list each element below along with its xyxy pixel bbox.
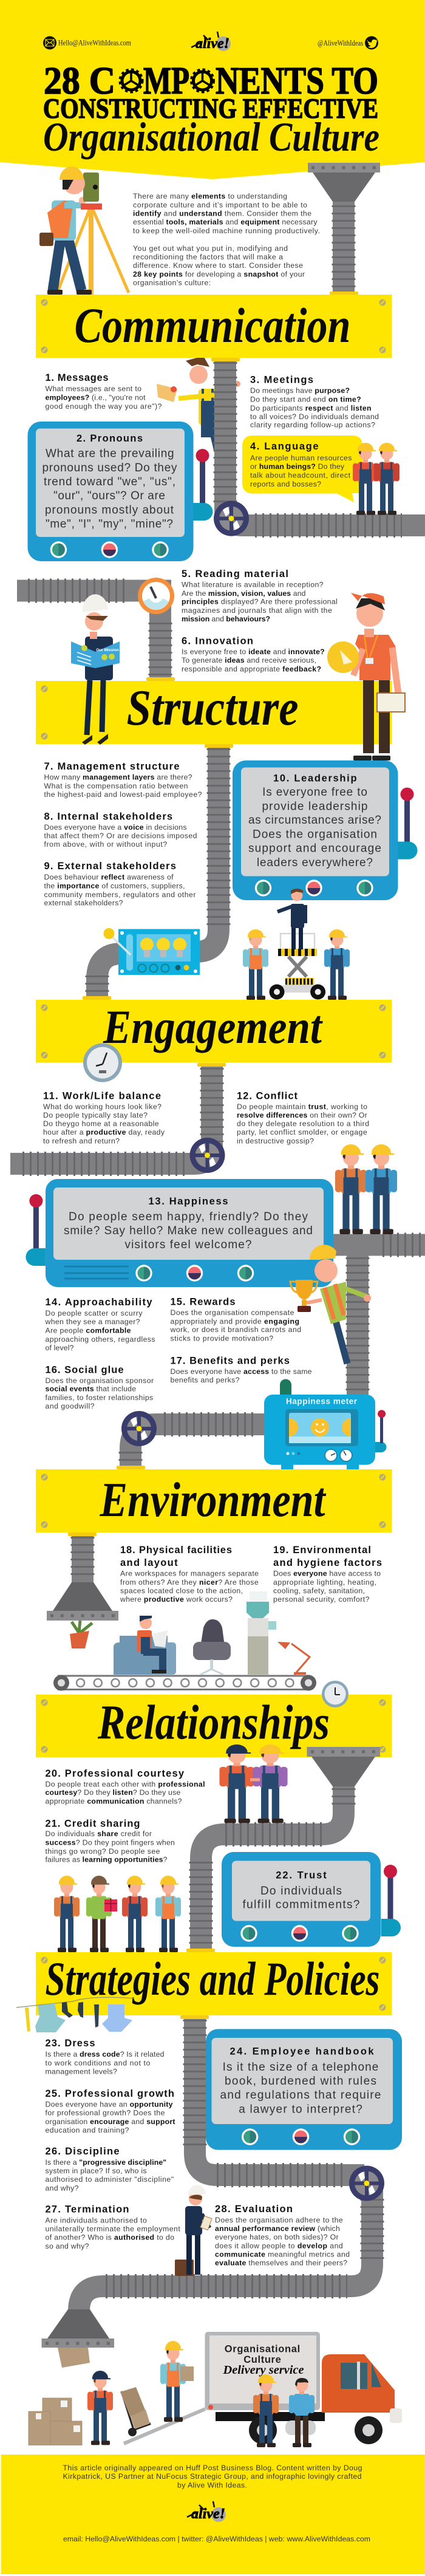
item 27 termination: unilaterally terminate the employment — [45, 2224, 180, 2233]
item 14 approachability: Are people comfortable — [45, 1327, 131, 1335]
item 28 evaluation: communicate meaningful metrics and — [215, 2250, 350, 2258]
item 17 benefits and perks — [170, 1356, 312, 1384]
panel: item 22 trust machine: 22. Trust — [276, 1870, 327, 1881]
item 14 approachability: Do people scatter or scurry — [45, 1309, 143, 1317]
item 18 physical facilities: from others? Are they nicer? Are those — [120, 1578, 259, 1587]
handshake workers — [219, 1744, 288, 1823]
truck box: Delivery service — [222, 2363, 304, 2377]
icon: email — [43, 36, 56, 50]
office furniture on conveyor — [53, 1591, 316, 1691]
item 28 evaluation: does it allow people to develop and — [215, 2241, 343, 2250]
panel: item 24 employee handbook machine: a lawyer to interpret? — [239, 2103, 362, 2116]
item 3 meetings: clarity regarding follow-up actions? — [250, 421, 375, 429]
intro funnel pipe — [308, 163, 380, 295]
intro text: corporate culture and it’s important to be able to — [133, 200, 307, 209]
item 25 professional growth: Does everyone have an opportunity — [45, 2100, 173, 2109]
item 21 credit sharing: Do individuals share credit for — [45, 1830, 152, 1838]
item 16 social glue — [45, 1365, 154, 1410]
item 18 physical facilities — [120, 1545, 259, 1604]
item 3 meetings: to all voices? Do individuals demand — [250, 412, 379, 421]
item 18 physical facilities: 18. Physical facilities — [120, 1545, 232, 1556]
panel: item 10 leadership machine — [233, 760, 418, 900]
item 27 termination — [45, 2204, 180, 2250]
clock on relationships bar — [322, 1681, 348, 1707]
contact row — [43, 32, 378, 52]
footer — [1, 2455, 425, 2574]
panel: item 24 employee handbook machine: Is it the size of a telephone — [223, 2061, 378, 2074]
ramp — [124, 2409, 205, 2444]
item 12 conflict: resolve differences on their own? Or — [237, 1111, 367, 1119]
item 5 reading material: principles displayed? Are there professional — [182, 598, 338, 606]
callout: item 4 language: or human beings? Do they — [250, 462, 345, 471]
pipe: happiness T junction — [333, 1245, 425, 1395]
callout: item 4 language: talk about headcount, direct — [250, 471, 351, 480]
callout: item 4 language — [242, 436, 362, 502]
intro text: 28 key points for developing a snapshot of your — [133, 270, 305, 278]
item 16 social glue: 16. Social glue — [45, 1365, 124, 1376]
item 15 rewards: sticks to provide motivation? — [170, 1334, 273, 1343]
item 9 external stakeholders — [44, 861, 195, 907]
section heading: Engagement — [36, 1000, 392, 1063]
item 8 internal stakeholders: Does everyone have a voice in decisions — [44, 823, 187, 832]
item 11 work life balance — [43, 1090, 165, 1146]
item 9 external stakeholders: community members, regulators and other — [44, 890, 195, 899]
panel: item 2 pronouns machine: What are the prevailing — [46, 448, 174, 460]
item 26 discipline: Is there a "progressive discipline" — [45, 2158, 166, 2167]
pipe and valve: happiness meter to environment — [117, 1411, 267, 1469]
footer credit text: Kirkpatrick, US Partner at NuFocus Strategic Group, and infographic lovingly crafted — [63, 2472, 362, 2481]
item 7 management structure: 7. Management structure — [44, 761, 180, 772]
item 7 management structure: How many management layers are there? — [44, 773, 192, 781]
item 7 management structure — [44, 761, 202, 799]
item 27 termination: so and why? — [45, 2242, 89, 2250]
item 1 messages: 1. Messages — [45, 372, 108, 383]
item 28 evaluation: 28. Evaluation — [215, 2204, 293, 2215]
item 3 meetings: Do they start and end on time? — [250, 395, 361, 404]
worker on ramp — [160, 2341, 186, 2422]
title line 1: 28 C — [44, 59, 115, 102]
tripod — [56, 205, 129, 295]
item 8 internal stakeholders: that affect them? Or are decisions imposed — [44, 832, 197, 840]
item 16 social glue: and goodwill? — [45, 1402, 95, 1410]
item 12 conflict: in destructive gossip? — [237, 1137, 314, 1146]
item 27 termination: 27. Termination — [45, 2204, 129, 2215]
panel: item 10 leadership machine: 10. Leadership — [273, 773, 357, 784]
item 18 physical facilities: where productive work occurs? — [120, 1595, 233, 1604]
messenger worker — [157, 356, 240, 453]
delivery scene — [29, 2332, 402, 2447]
footer credit text — [63, 2464, 362, 2489]
item 8 internal stakeholders: from above, with or without input? — [44, 840, 167, 849]
truck box: Culture — [243, 2354, 281, 2365]
section heading: Structure — [36, 680, 392, 744]
item 21 credit sharing: 21. Credit sharing — [45, 1819, 140, 1830]
item 17 benefits and perks: 17. Benefits and perks — [170, 1356, 290, 1367]
panel: item 10 leadership machine: provide leadership — [262, 801, 368, 813]
item 11 work life balance: 11. Work/Life balance — [43, 1090, 161, 1101]
item 20 professional courtesy: Do people treat each other with professional — [45, 1780, 205, 1788]
item 8 internal stakeholders: 8. Internal stakeholders — [44, 811, 172, 822]
item 28 evaluation — [215, 2204, 350, 2267]
item 5 reading material: What literature is available in reception? — [182, 581, 324, 589]
item 15 rewards: work, or does it brandish carrots and — [170, 1325, 301, 1334]
item 25 professional growth: education and training? — [45, 2126, 129, 2134]
header yellow banner — [0, 0, 425, 179]
section heading: Communication: Communication — [74, 298, 351, 353]
item 26 discipline — [45, 2146, 174, 2192]
item 15 rewards — [170, 1297, 301, 1343]
item 19 environmental and hygiene: cooling, safety, sanitation, — [273, 1587, 365, 1595]
item 15 rewards: 15. Rewards — [170, 1297, 236, 1308]
callout: item 4 language: reports and bosses? — [250, 480, 321, 488]
item 5 reading material: mission and behaviours? — [182, 615, 270, 623]
item 11 work life balance: Do people typically stay late? — [43, 1111, 148, 1119]
panel: item 2 pronouns machine — [28, 422, 212, 561]
item 12 conflict — [237, 1090, 369, 1146]
intro text: to keep the well-oiled machine running productively. — [133, 227, 320, 235]
item 19 environmental and hygiene: and hygiene factors — [273, 1557, 382, 1568]
item 3 meetings: 3. Meetings — [250, 374, 313, 385]
item 9 external stakeholders: the importance of customers, suppliers, — [44, 882, 185, 890]
manager with briefcase — [175, 2185, 212, 2276]
trophy — [290, 1280, 318, 1312]
plant — [70, 1621, 92, 1648]
item 27 termination: of another? Who is authorised to do — [45, 2233, 174, 2242]
panel: item 2 pronouns machine: "me", "I", "my", "mine"? — [46, 518, 173, 531]
truck box — [205, 2332, 325, 2421]
item 12 conflict: 12. Conflict — [237, 1090, 298, 1101]
panel: item 2 pronouns machine: trend toward "we", "us", — [44, 476, 175, 488]
item 20 professional courtesy: 20. Professional courtesy — [45, 1768, 185, 1779]
worker with cap — [87, 2371, 113, 2445]
item 11 work life balance: hour after a productive day, ready — [43, 1128, 165, 1136]
happiness meter — [264, 1379, 386, 1469]
section heading: Relationships: Relationships — [97, 1696, 330, 1749]
lift — [270, 934, 325, 1000]
item 9 external stakeholders: external stakeholders? — [44, 899, 123, 907]
panel: item 2 pronouns machine: 2. Pronouns — [76, 433, 143, 444]
pipe: strategies to valve to funnel — [41, 2015, 384, 2348]
item 11 work life balance: What do working hours look like? — [43, 1102, 162, 1111]
reading man with mission book — [71, 594, 120, 745]
pipe: communication to valve — [211, 358, 425, 536]
item 5 reading material: 5. Reading material — [182, 569, 288, 579]
panel: item 2 pronouns machine: "our", "ours"? Or are — [53, 490, 165, 502]
item 1 messages: good enough the way you are")? — [45, 402, 162, 411]
manager on scissor lift with two workers — [243, 889, 350, 1000]
callout: item 4 language: Are people human resources — [250, 454, 352, 462]
item 14 approachability — [45, 1297, 155, 1352]
falling box — [58, 2348, 90, 2368]
item 17 benefits and perks: Does everyone have access to the same — [170, 1367, 312, 1376]
item 21 credit sharing: things go wrong? Do people see — [45, 1847, 160, 1856]
item 6 innovation — [182, 636, 325, 673]
pipe: relationships funnel to strategies — [186, 1747, 380, 1952]
item 21 credit sharing: failures as learning opportunities? — [45, 1856, 168, 1864]
panel: item 10 leadership machine: Does the organisation — [253, 828, 377, 841]
intro text: You get out what you put in, modifying and — [133, 244, 288, 253]
item 18 physical facilities: and layout — [120, 1557, 178, 1568]
truck cab — [249, 2354, 402, 2444]
footer logo — [187, 2501, 226, 2522]
item 14 approachability: 14. Approachability — [45, 1297, 152, 1308]
climbing worker with trophy — [290, 1245, 371, 1364]
panel: item 2 pronouns machine: pronouns used? Do they — [42, 462, 177, 474]
item 6 innovation: responsible and appropriate feedback? — [182, 664, 321, 673]
item 12 conflict: party, let conflict smolder, or engage — [237, 1128, 367, 1136]
hand truck — [120, 2387, 151, 2436]
four workers sharing credit — [54, 1876, 181, 1952]
pressure gauge — [138, 578, 174, 614]
panel: item 22 trust machine: fulfill commitments? — [243, 1899, 359, 1911]
pipe: structure down to lights panel and engagement — [83, 744, 233, 1000]
item 23 dress: to work conditions and not to — [45, 2058, 150, 2067]
item 19 environmental and hygiene: 19. Environmental — [273, 1545, 371, 1556]
desk lamp — [277, 1642, 310, 1675]
truck box: Organisational — [225, 2343, 300, 2354]
item 3 meetings: Do meetings have purpose? — [250, 386, 350, 395]
item 21 credit sharing: success? Do they point fingers when — [45, 1838, 175, 1847]
item 12 conflict: Do people maintain trust, working to — [237, 1102, 367, 1111]
panel: item 13 happiness machine: smile? Say hello? Make new colleagues and — [64, 1225, 313, 1237]
item 15 rewards: Does the organisation compensate — [170, 1308, 294, 1317]
item 19 environmental and hygiene — [273, 1545, 382, 1604]
pipe and valve: engagement to conflict — [10, 1063, 226, 1173]
orange shirt man with bulb and clipboard — [327, 593, 405, 760]
panel: item 10 leadership machine: Is everyone free to — [262, 786, 367, 799]
item 23 dress — [45, 2038, 165, 2076]
logo: alive — [191, 32, 231, 52]
item 14 approachability: of level? — [45, 1344, 74, 1352]
item 23 dress: 23. Dress — [45, 2038, 95, 2049]
item 26 discipline: system in place? If so, who is — [45, 2167, 147, 2175]
twitter handle: @AliveWithIdeas — [318, 38, 363, 47]
section heading: Structure: Structure — [126, 680, 299, 736]
panel: item 10 leadership machine: leaders everywhere? — [257, 856, 373, 869]
item 12 conflict: do they delegate resolution to a third — [237, 1119, 369, 1128]
title line 1 — [44, 59, 378, 102]
control panel with light bulbs — [103, 928, 200, 975]
section heading: Environment: Environment — [100, 1474, 327, 1527]
item 7 management structure: What is the compensation ratio between — [44, 782, 188, 790]
pipe and gauge: structure — [17, 578, 175, 681]
item 15 rewards: appropriately and provide engaging — [170, 1317, 299, 1325]
item 27 termination: Are individuals authorised to — [45, 2216, 147, 2225]
section heading: Environment — [36, 1469, 392, 1532]
footer contact line: email: Hello@AliveWithIdeas.com | twitter: @AliveWithIdeas | web: www.AliveWithIdeas.com — [63, 2535, 370, 2543]
item 9 external stakeholders: Does behaviour reflect awareness of — [44, 873, 174, 881]
item 14 approachability: approaching others, regardless — [45, 1335, 155, 1344]
item 28 evaluation: Does the organisation adhere to the — [215, 2216, 343, 2224]
title — [43, 59, 379, 160]
item 1 messages: employees? (i.e., "you're not — [45, 394, 146, 402]
item 21 credit sharing — [45, 1819, 175, 1864]
item 26 discipline: 26. Discipline — [45, 2146, 119, 2157]
funnel pipe: environment — [47, 1532, 118, 1621]
title line 1: MP — [143, 59, 189, 102]
panel: item 13 happiness machine: visitors feel welcome? — [125, 1238, 251, 1251]
office chair — [193, 1619, 231, 1675]
item 1 messages — [45, 372, 162, 411]
item 18 physical facilities: spaces located close to the action, — [120, 1587, 243, 1595]
two workers standing on pipe — [335, 1144, 397, 1234]
item 28 evaluation: everyone hates, on both sides)? Or — [215, 2233, 339, 2241]
item 19 environmental and hygiene: Does everyone have access to — [273, 1570, 381, 1578]
valve wheel — [214, 501, 249, 536]
item 11 work life balance: Do theygo home at a reasonable — [43, 1119, 159, 1128]
footer logo: alive! — [191, 2506, 225, 2522]
item 28 evaluation: evaluate themselves and their peers? — [215, 2259, 347, 2267]
panel: item 24 employee handbook machine: 24. Employee handbook — [229, 2046, 374, 2057]
item 25 professional growth — [45, 2088, 175, 2134]
item 28 evaluation: annual performance review (which — [215, 2224, 340, 2233]
icon: twitter — [365, 36, 378, 50]
item 6 innovation: Is everyone free to ideate and innovate? — [182, 647, 325, 656]
happiness meter: Happiness meter — [286, 1397, 358, 1406]
email address: Hello@AliveWithIdeas.com — [58, 38, 131, 47]
item 26 discipline: authorised to administer "discipline" — [45, 2175, 174, 2184]
panel: item 22 trust machine: Do individuals — [260, 1885, 342, 1898]
item 6 innovation: 6. Innovation — [182, 636, 253, 647]
panel: item 10 leadership machine: support and encourage — [248, 842, 381, 855]
item 25 professional growth: organisation encourage and support — [45, 2117, 175, 2126]
title line 1: NENTS TO — [216, 59, 378, 102]
clothes line — [16, 1997, 134, 2032]
item 20 professional courtesy — [45, 1768, 205, 1806]
item 23 dress: management levels? — [45, 2068, 117, 2076]
sofa with reading worker — [114, 1616, 176, 1675]
item 8 internal stakeholders — [44, 811, 197, 849]
item 5 reading material — [182, 569, 338, 623]
panel: item 22 trust machine — [222, 1852, 401, 1947]
item 11 work life balance: to refresh and return? — [43, 1137, 120, 1146]
item 18 physical facilities: Are workspaces for managers separate — [120, 1570, 259, 1578]
item 16 social glue: families, to foster relationships — [45, 1393, 153, 1402]
section heading: Relationships — [36, 1695, 392, 1757]
item 23 dress: Is there a dress code? Is it related — [45, 2050, 165, 2058]
item 6 innovation: To generate ideas and receive serious, — [182, 656, 316, 664]
panel: item 13 happiness machine: Do people seem happy, friendly? Do they — [69, 1211, 308, 1223]
panel: item 24 employee handbook machine — [206, 2029, 402, 2150]
panel: item 2 pronouns machine: pronouns mostly about — [45, 504, 174, 516]
item 20 professional courtesy: courtesy? Do they listen? Do they use — [45, 1788, 180, 1797]
item 14 approachability: when they see a manager? — [45, 1317, 140, 1326]
intro text: difference. Know where to start. Consider these — [133, 261, 303, 270]
panel: item 13 happiness machine: 13. Happiness — [148, 1196, 228, 1207]
logo: alive: alive! — [195, 36, 229, 52]
item 3 meetings — [250, 374, 379, 429]
item 19 environmental and hygiene: personal security, comfort? — [273, 1595, 370, 1604]
two men at truck — [253, 2374, 279, 2447]
item 26 discipline: and why? — [45, 2184, 79, 2192]
item 19 environmental and hygiene: appropriate lighting, heating, — [273, 1578, 376, 1587]
panel: item 10 leadership machine: as circumstances arise? — [248, 814, 381, 827]
item 5 reading material: Are the mission, vision, values and — [182, 589, 306, 598]
panel: item 24 employee handbook machine: book, burdened with rules — [225, 2075, 376, 2088]
intro text: reconditioning the factors that will make a — [133, 253, 283, 261]
water cooler — [246, 1591, 276, 1675]
item 3 meetings: Do participants respect and listen — [250, 404, 372, 412]
item 5 reading material: magazines and journals that align with the — [182, 606, 332, 615]
section heading: Engagement: Engagement — [103, 1000, 323, 1053]
manager — [277, 889, 307, 949]
item 7 management structure: the highest-paid and lowest-paid employee? — [44, 790, 202, 799]
stacked boxes — [29, 2398, 82, 2445]
intro text: essential tools, materials and equipment necessary — [133, 218, 318, 227]
item 20 professional courtesy: appropriate communication channels? — [45, 1797, 182, 1806]
reading man with mission book: Our Mission — [96, 648, 119, 652]
intro text — [133, 192, 320, 287]
panel: item 24 employee handbook machine: and regulations that require — [220, 2089, 381, 2102]
item 1 messages: What messages are sent to — [45, 384, 141, 393]
intro text: identify and understand them. Consider them the — [133, 209, 311, 217]
intro text: There are many elements to understanding — [133, 192, 287, 200]
legs — [53, 238, 81, 290]
surveyor worker illustration — [39, 166, 129, 295]
item 25 professional growth: 25. Professional growth — [45, 2088, 174, 2099]
clock — [83, 1044, 122, 1082]
item 25 professional growth: for professional growth? Does the — [45, 2109, 165, 2117]
panel: item 13 happiness machine — [25, 1179, 333, 1287]
item 17 benefits and perks: benefits and perks? — [170, 1376, 240, 1384]
conveyor — [53, 1675, 316, 1691]
callout: item 4 language: 4. Language — [250, 441, 318, 452]
footer credit text: by Alive With Ideas. — [177, 2481, 247, 2489]
item 16 social glue: social events that include — [45, 1385, 136, 1393]
item 16 social glue: Does the organisation sponsor — [45, 1376, 154, 1385]
footer credit text: This article originally appeared on Huff Post Business Blog. Content written by Doug — [63, 2464, 362, 2472]
item 9 external stakeholders: 9. External stakeholders — [44, 861, 176, 872]
workers pair — [353, 443, 399, 515]
intro text: organisation’s culture: — [133, 279, 211, 287]
